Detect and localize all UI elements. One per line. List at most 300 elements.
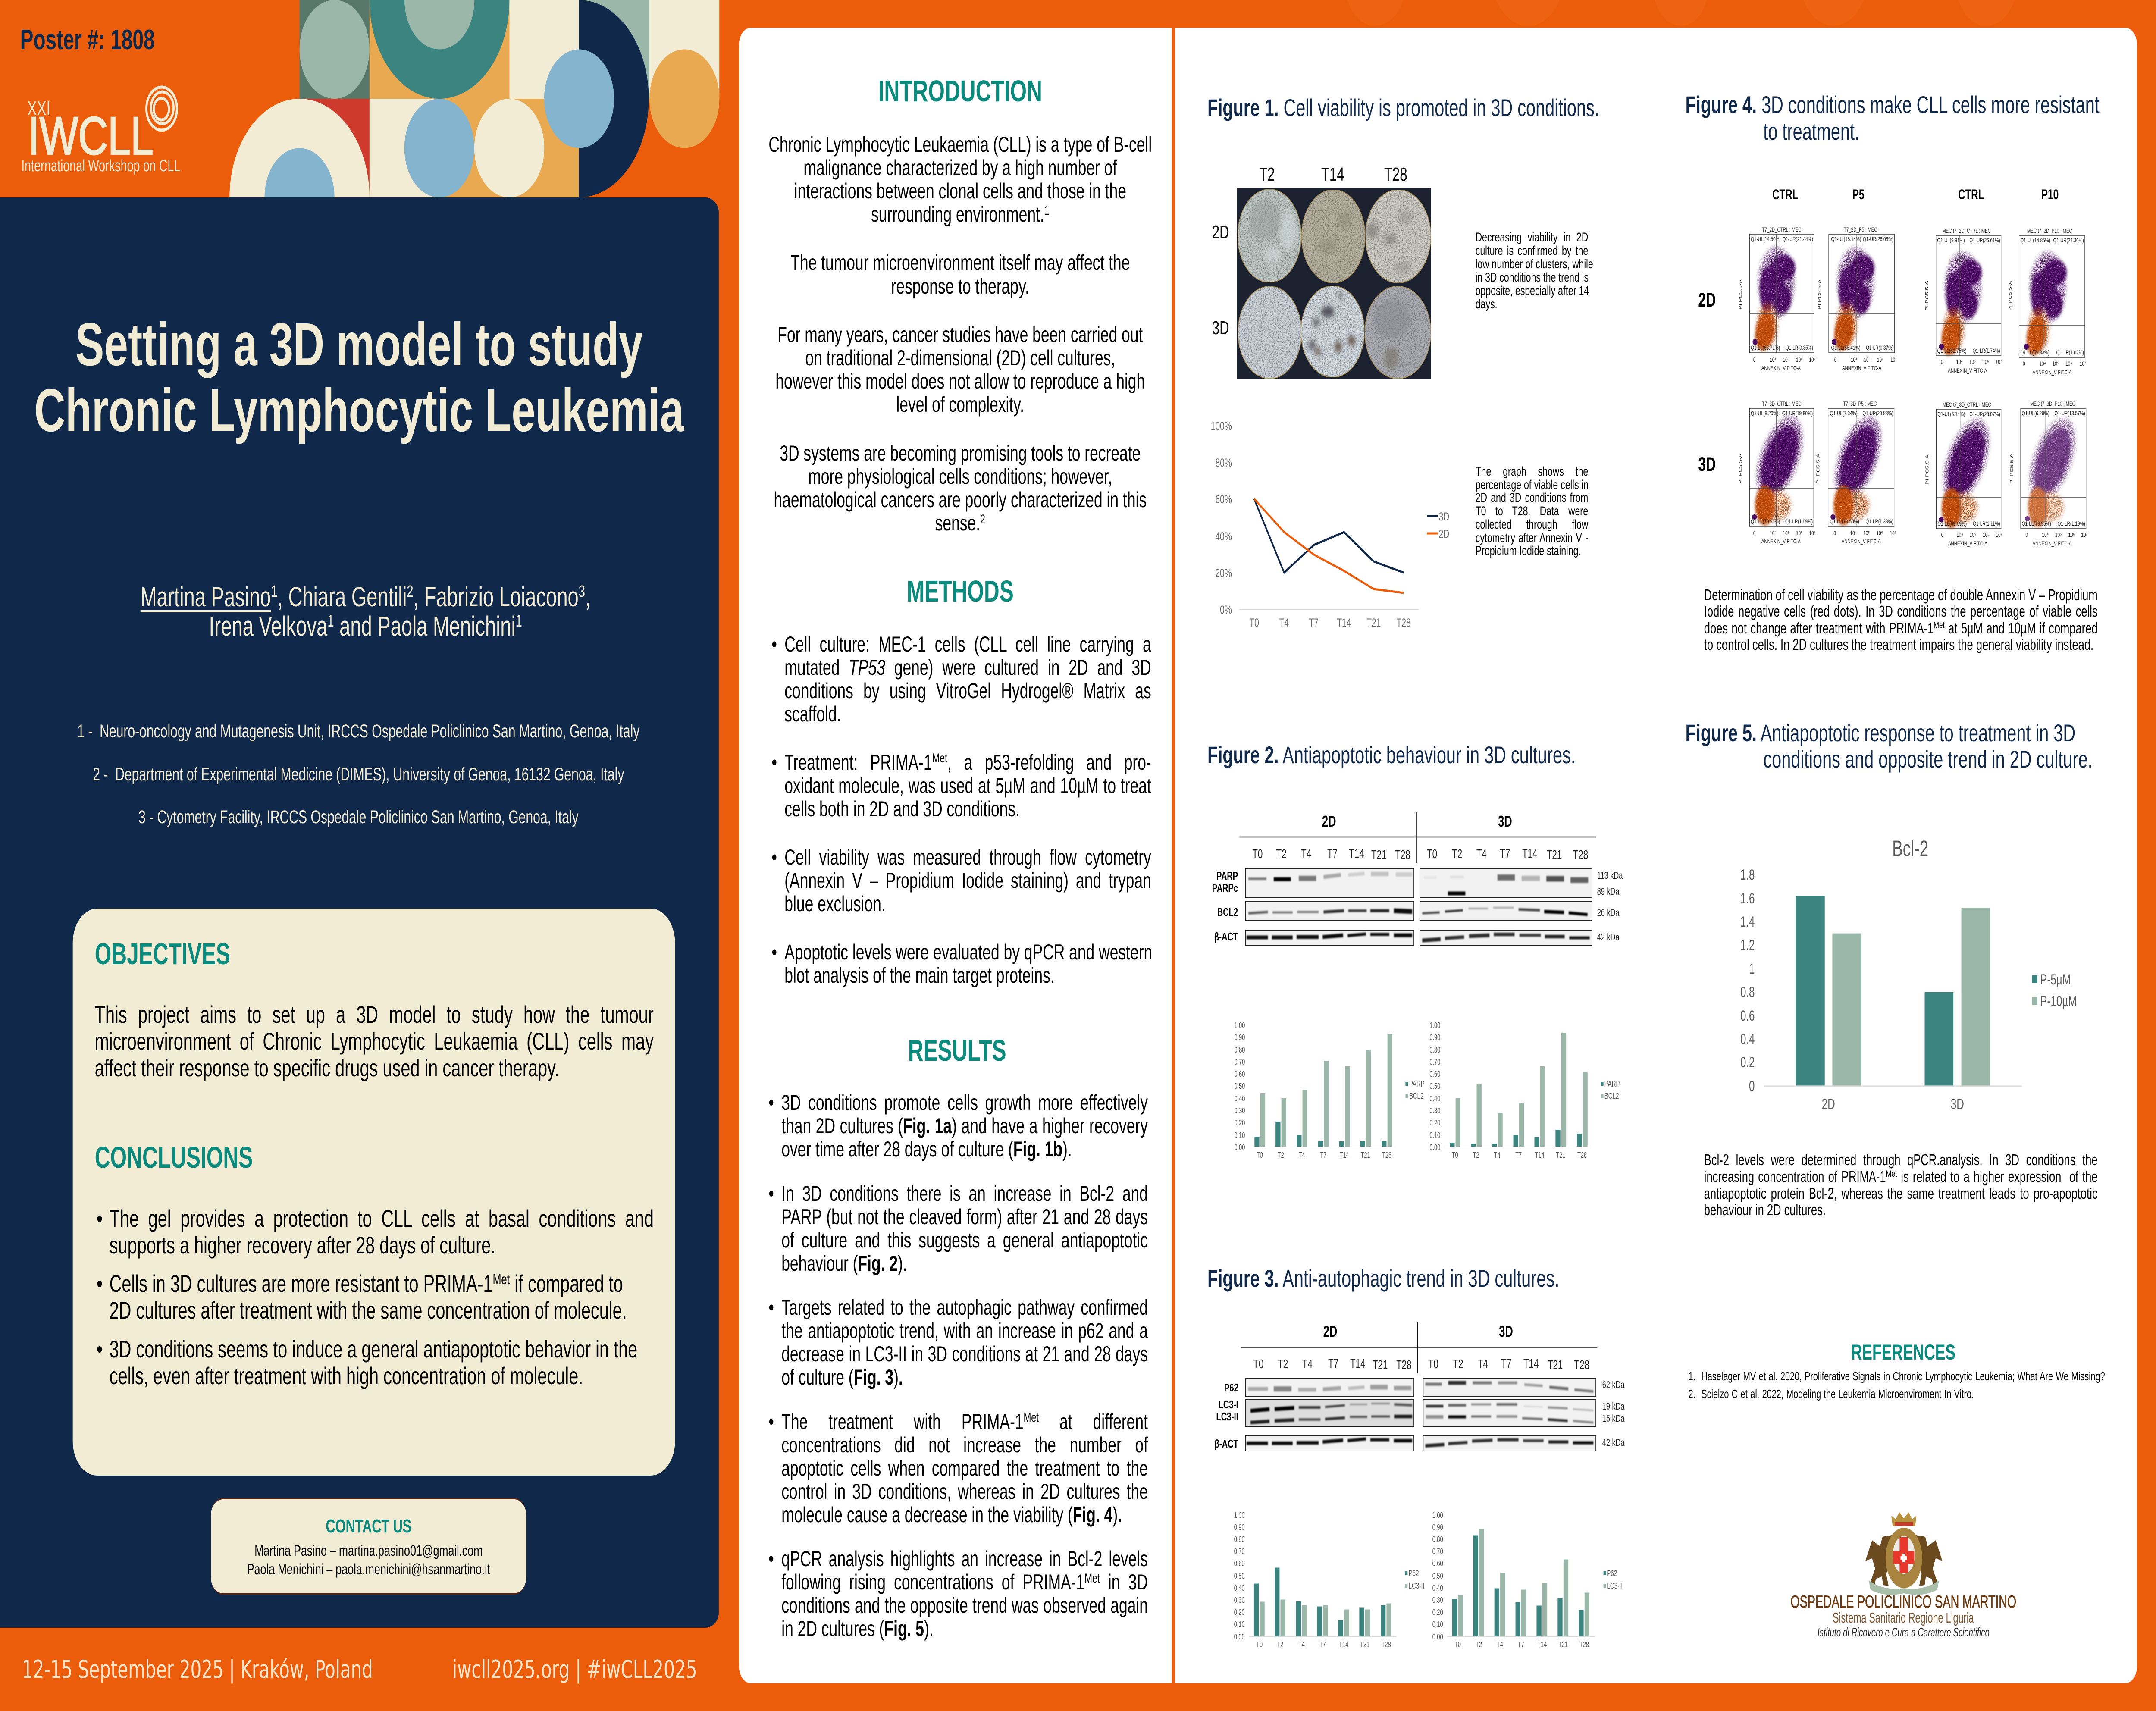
plot: 3D CTRL second series: 10⁷: [1996, 531, 2002, 538]
y axis labels: 0.4: [1740, 1031, 1755, 1047]
results list: behaviour (Fig. 2).: [781, 1251, 907, 1275]
bar chart: 3D P62 and LC3-II: T7: [1518, 1640, 1524, 1649]
y axis labels: 1.4: [1740, 914, 1755, 930]
plot: 2D P10: Q1-UL(14.85%): [2020, 237, 2050, 244]
plot: 3D P5: 10⁶: [1877, 530, 1883, 536]
contact heading: CONTACT US: [326, 1516, 411, 1537]
plot: 2D CTRL second series: MEC t7_2D_CTRL : MEC: [1942, 227, 1991, 234]
bar chart: 3D P62 and LC3-II: P62: [1607, 1569, 1617, 1578]
plot: 3D P10: Q1-LL(78.95%): [2022, 520, 2051, 527]
objectives text: affect their response to specific drugs used in cancer therapy.: [95, 1054, 559, 1081]
western blot header: 3D: [1498, 812, 1512, 830]
western blot header: T4: [1302, 1357, 1313, 1371]
line chart: percentage of viable cells: T21: [1366, 616, 1381, 629]
results list: conditions and the opposite trend was observed again: [781, 1593, 1148, 1617]
western blot header: T4: [1478, 1357, 1488, 1371]
poster number: Poster #: 1808: [20, 24, 155, 55]
results list: than 2D cultures (Fig. 1a) and have a higher recovery: [781, 1114, 1148, 1138]
bar chart: 3D P62 and LC3-II: T2: [1476, 1640, 1482, 1649]
bar chart: 2D P62 and LC3-II: 0.10: [1234, 1620, 1245, 1629]
western blot header: T28: [1573, 848, 1588, 862]
bar chart: 3D P62 and LC3-II: T21: [1558, 1640, 1568, 1649]
bar chart: 2D P62 and LC3-II: 0.00: [1234, 1633, 1245, 1641]
bar chart: 3D PARP and BCL2: [1429, 1021, 1620, 1159]
line chart: percentage of viable cells: [1211, 420, 1449, 629]
bar chart: 2D PARP and BCL2: T4: [1299, 1151, 1305, 1159]
methods list: Cell culture: MEC-1 cells (CLL cell line carrying a: [784, 632, 1151, 656]
plot: 2D P5: ANNEXIN_V FITC-A: [1842, 364, 1881, 371]
hospital name text: Sistema Sanitario Regione Liguria: [1833, 1610, 1974, 1626]
text: 2.: [1689, 1387, 1695, 1401]
bar chart: 3D PARP and BCL2: 0.10: [1429, 1131, 1440, 1140]
bar chart: 3D PARP and BCL2: T7: [1515, 1151, 1522, 1159]
western blot header: T14: [1522, 847, 1538, 861]
western blot header: T28: [1395, 848, 1410, 862]
plot: 2D P10: [2008, 227, 2086, 376]
line chart: percentage of viable cells: T4: [1279, 616, 1289, 629]
plot: 3D P10: 10⁴: [2042, 531, 2049, 538]
western blot molecular weights: 42 kDa: [1602, 1437, 1625, 1448]
bar chart: 2D P62 and LC3-II: T21: [1360, 1640, 1369, 1649]
bar chart: 3D PARP and BCL2: BCL2: [1604, 1092, 1619, 1101]
panel: contact us: [211, 1498, 526, 1595]
title: [0, 311, 718, 443]
flow labels: P5: [1852, 187, 1865, 202]
plot: 3D CTRL second series: 10⁶: [1983, 531, 1989, 538]
western blot protein labels: β-ACT: [1214, 930, 1238, 943]
plot: 2D P10: 10⁵: [2053, 360, 2059, 367]
plot: 2D CTRL: 10⁶: [1796, 356, 1802, 363]
figure 4 caption: [1704, 587, 2098, 653]
bar chart: 3D PARP and BCL2: 0.70: [1429, 1058, 1440, 1066]
bar chart: 2D PARP and BCL2: 0.30: [1234, 1106, 1245, 1115]
line chart: percentage of viable cells: 0%: [1220, 603, 1232, 616]
plot: 3D CTRL: T7_3D_CTRL : MEC: [1762, 400, 1801, 407]
plot: 2D CTRL second series: 10⁴: [1956, 358, 1963, 365]
legend: P-5µM: [2040, 971, 2071, 988]
hospital name text: OSPEDALE POLICLINICO SAN MARTINO: [1790, 1592, 2016, 1611]
category labels: 2D: [1822, 1096, 1835, 1112]
bar chart: 3D P62 and LC3-II: 0.10: [1432, 1620, 1443, 1629]
figure 4: flow cytometry plots: [1693, 181, 2096, 552]
plot: 2D P10: Q1-LL(59.83%): [2020, 349, 2049, 356]
results list: molecule cause a decrease in the viability (Fig. 4).: [781, 1502, 1122, 1526]
plot: 3D CTRL: 10⁴: [1770, 530, 1776, 536]
figure 1 text: microscopy description: in 3D conditions the trend is: [1476, 270, 1589, 285]
microscopy image labels: T28: [1384, 164, 1407, 185]
results list: apoptotic cells when compared the treatment to the: [781, 1456, 1148, 1480]
western blot header: T0: [1252, 847, 1263, 861]
objectives text: [95, 1001, 654, 1081]
plot: 2D CTRL: ANNEXIN_V FITC-A: [1761, 364, 1801, 371]
plot: 3D CTRL second series: MEC t7_3D_CTRL : MEC: [1943, 401, 1991, 408]
results list: following rising concentrations of PRIMA-1Met in 3D: [781, 1570, 1148, 1594]
bar chart: 3D P62 and LC3-II: T0: [1454, 1640, 1461, 1649]
results list: the antiapoptotic trend, with an increase in p62 and a: [781, 1319, 1148, 1343]
authors: Martina Pasino1, Chiara Gentili2, Fabrizio Loiacono3,: [141, 581, 591, 612]
contact details: Martina Pasino – martina.pasino01@gmail.com: [254, 1542, 483, 1559]
text: •: [772, 845, 777, 869]
plot: 3D P10: MEC t7_3D_P10 : MEC: [2030, 400, 2075, 407]
plot: 2D P10: 10⁴: [2039, 360, 2046, 367]
y axis labels: 1: [1749, 961, 1755, 977]
plot: 3D CTRL: 0: [1753, 530, 1756, 536]
plot: 2D CTRL second series: ANNEXIN_V FITC-A: [1948, 367, 1987, 374]
figure 1 text: graph description: [1476, 465, 1588, 558]
figure 2: western blot and bar charts: [1207, 806, 1626, 1164]
bar chart: 3D PARP and BCL2: T21: [1556, 1151, 1565, 1159]
bar chart: 3D PARP and BCL2: 0.80: [1429, 1046, 1440, 1054]
figure 5 title: conditions and opposite trend in 2D culture.: [1763, 746, 2093, 773]
figure 3 title: Figure 3. Anti-autophagic trend in 3D cultures.: [1207, 1265, 1559, 1292]
plot: 2D CTRL second series: Q1-LL(61.75%): [1937, 347, 1966, 354]
western blot header: T21: [1371, 848, 1386, 862]
IWCLL logo: International Workshop on CLL: [22, 157, 180, 175]
plot: 3D P5: Q1-LR(1.33%): [1866, 518, 1893, 525]
western blot protein labels: [1214, 1381, 1238, 1450]
plot: 3D CTRL: 10⁷: [1809, 530, 1815, 536]
background: faint orange shapes in top strip: [1284, 0, 2156, 28]
bar chart: 3D PARP and BCL2: 0.40: [1429, 1094, 1440, 1103]
footer: dates and website: iwcll2025.org | #iwCLL2025: [452, 1655, 697, 1684]
western blot header: T21: [1547, 848, 1562, 862]
methods list: blue exclusion.: [784, 892, 886, 916]
bar chart: 2D PARP and BCL2: PARP: [1409, 1080, 1425, 1089]
plot: 2D P10: Q1-LR(1.02%): [2056, 349, 2084, 356]
methods list: scaffold.: [784, 702, 841, 726]
western blot molecular weights: 89 kDa: [1597, 886, 1620, 897]
results list: 3D conditions promote cells growth more effectively: [781, 1091, 1148, 1115]
plot: 2D P10: 0: [2023, 360, 2025, 367]
bar chart: 2D P62 and LC3-II: T2: [1277, 1640, 1283, 1649]
figure 1 text: microscopy description: low number of clusters, while: [1476, 257, 1593, 271]
row labels 2D 3D: 3D: [1698, 453, 1716, 475]
bar chart: 2D PARP and BCL2: 0.50: [1234, 1082, 1245, 1091]
bar chart: 2D PARP and BCL2: 0.80: [1234, 1046, 1245, 1054]
plot: 2D P5: 10⁷: [1890, 356, 1897, 363]
methods list: Cell viability was measured through flow cytometry: [784, 845, 1151, 869]
hospital name text: [1790, 1592, 2016, 1639]
conclusions list: 3D conditions seems to induce a general antiapoptotic behavior in the: [110, 1335, 637, 1363]
western blot membranes: [1245, 868, 1592, 946]
microscopy image labels: T14: [1321, 164, 1344, 185]
figure 5 caption: [1704, 1152, 2098, 1219]
y axis labels: 1.2: [1740, 937, 1755, 953]
line chart: percentage of viable cells: T28: [1397, 616, 1411, 629]
plot: 3D CTRL second series: Q1-LR(1.11%): [1973, 520, 2000, 527]
plot: 2D CTRL second series: 0: [1941, 358, 1943, 365]
plot: 3D CTRL: 10⁶: [1796, 530, 1802, 536]
references list: Haselager MV et al. 2020, Proliferative Signals in Chronic Lymphocytic Leukemia; What Are We Missing?: [1701, 1369, 2105, 1383]
contact details: [211, 1542, 526, 1579]
text: •: [768, 1409, 774, 1433]
bar chart: 2D PARP and BCL2: 0.20: [1234, 1119, 1245, 1127]
western blot membranes: [1245, 1378, 1596, 1451]
plot: 2D CTRL: Q1-UR(21.44%): [1783, 235, 1813, 242]
western blot molecular weights: 15 kDa: [1602, 1413, 1625, 1424]
bar chart: 2D PARP and BCL2: 0.70: [1234, 1058, 1245, 1066]
plot: 2D CTRL: [1738, 226, 1815, 371]
bar chart: 3D P62 and LC3-II: 0.00: [1432, 1633, 1443, 1641]
plot: 2D P5: [1817, 226, 1897, 371]
contact details: Paola Menichini – paola.menichini@hsanmartino.it: [247, 1561, 490, 1578]
flow labels: P10: [2041, 187, 2059, 202]
text: •: [97, 1335, 103, 1363]
plot: 2D CTRL: Q1-LL(63.71%): [1751, 344, 1780, 351]
figure 4 caption: Iodide negative cells (red dots). In 3D conditions the percentage of viable cells: [1704, 602, 2098, 620]
plot: 3D CTRL second series: Q1-LL(69.69%): [1937, 520, 1967, 527]
plot: 2D P5: 10⁶: [1877, 356, 1883, 363]
introduction text: 3D systems are becoming promising tools to recreate: [780, 441, 1141, 465]
plot: 3D CTRL second series: Q1-UR(23.07%): [1969, 411, 2000, 417]
bar chart: 2D P62 and LC3-II: T4: [1298, 1640, 1305, 1649]
plot: 3D P10: PI PC5.5-A: [2009, 453, 2014, 484]
western blot header: T2: [1452, 847, 1462, 861]
references list: Scielzo C et al. 2022, Modeling the Leukemia Microenviroment In Vitro.: [1701, 1387, 1974, 1401]
y axis labels: 0.8: [1740, 984, 1755, 1000]
text: •: [768, 1295, 774, 1319]
methods list: mutated TP53 gene) were cultured in 2D and 3D: [784, 655, 1151, 680]
y axis labels: 0.2: [1740, 1054, 1755, 1071]
introduction text: level of complexity.: [896, 392, 1024, 417]
plot: 2D P10: 10⁶: [2065, 360, 2072, 367]
heading: results: RESULTS: [908, 1034, 1006, 1067]
bar chart: 3D P62 and LC3-II: LC3-II: [1607, 1582, 1623, 1591]
western blot header: T7: [1328, 1357, 1338, 1371]
methods list: [784, 633, 1151, 987]
figure 5 caption: antiapoptotic protein Bcl-2, whereas the same treatment leads to pro-apoptotic: [1704, 1185, 2098, 1202]
plot: 3D P5: PI PC5.5-A: [1815, 453, 1821, 484]
bar chart: 3D PARP and BCL2: 0.30: [1429, 1106, 1440, 1115]
western blot molecular weights: [1602, 1379, 1625, 1448]
y axis labels: [1740, 867, 1755, 1094]
plot: 3D CTRL: Q1-LR(1.09%): [1785, 518, 1813, 525]
bar chart: 2D P62 and LC3-II: T7: [1319, 1640, 1326, 1649]
plot: 3D CTRL second series: PI PC5.5-A: [1925, 454, 1930, 485]
line chart: percentage of viable cells: 80%: [1216, 456, 1232, 469]
plot: 2D CTRL: Q1-LR(0.35%): [1786, 344, 1813, 351]
plot: 3D CTRL second series: 10⁴: [1956, 531, 1963, 538]
bar chart: 2D PARP and BCL2: T14: [1340, 1151, 1349, 1159]
text: •: [772, 940, 777, 964]
introduction text: [764, 133, 1156, 535]
plot: 3D P10: 0: [2025, 531, 2028, 538]
western blot header: T28: [1574, 1358, 1589, 1372]
results list: The treatment with PRIMA-1Met at different: [781, 1409, 1148, 1433]
plot: 2D P5: T7_2D_P5 : MEC: [1844, 226, 1877, 233]
bar chart: 3D P62 and LC3-II: 0.80: [1432, 1535, 1443, 1544]
methods list: cells both in 2D and 3D conditions.: [784, 797, 1020, 821]
plot: 3D P10: 10⁷: [2081, 531, 2087, 538]
bar chart: 2D PARP and BCL2: T2: [1278, 1151, 1284, 1159]
western blot header: T0: [1253, 1357, 1263, 1371]
western blot header: 2D: [1322, 812, 1336, 830]
figure 1 text: microscopy description: Decreasing viability in 2D: [1476, 230, 1588, 244]
figure 1 text: microscopy description: culture is confirmed by the: [1476, 244, 1588, 258]
line chart: percentage of viable cells: T7: [1309, 616, 1319, 629]
western blot header: [1241, 1322, 1597, 1373]
western blot header: T14: [1350, 1357, 1366, 1371]
references list: [1701, 1368, 2105, 1403]
legend: [2032, 971, 2077, 1009]
line chart: percentage of viable cells: 60%: [1216, 493, 1232, 506]
footer: dates and website: [19, 1651, 703, 1690]
figure 1 text: microscopy description: [1476, 231, 1588, 311]
plot: 2D CTRL second series: 10⁶: [1982, 358, 1989, 365]
plot: 3D CTRL second series: 0: [1941, 531, 1943, 538]
figure 1 text: microscopy description: opposite, especially after 14: [1476, 284, 1589, 298]
results list: of culture and this suggests a general antiapoptotic: [781, 1228, 1148, 1252]
plot: 2D P5: 10⁴: [1851, 356, 1857, 363]
crest: griffins, shield and crown: [1865, 1512, 1943, 1595]
bar chart: 3D PARP and BCL2: T0: [1452, 1151, 1458, 1159]
western blot protein labels: P62: [1224, 1381, 1238, 1394]
plot: 3D P5: 0: [1833, 530, 1836, 536]
bar chart: 3D P62 and LC3-II: 0.60: [1432, 1559, 1443, 1568]
bar chart: 3D PARP and BCL2: T2: [1473, 1151, 1479, 1159]
bar chart: 2D PARP and BCL2: T7: [1320, 1151, 1326, 1159]
figure 2 title: Figure 2. Antiapoptotic behaviour in 3D cultures.: [1207, 741, 1576, 768]
plot: 2D CTRL: 10⁴: [1770, 356, 1776, 363]
text: •: [768, 1091, 774, 1115]
plot: 2D CTRL second series: Q1-UL(9.91%): [1937, 237, 1965, 244]
figure 5 caption: Bcl-2 levels were determined through qPCR.analysis. In 3D conditions the: [1704, 1151, 2098, 1169]
y axis labels: 0: [1749, 1078, 1755, 1094]
bar chart: 3D PARP and BCL2: 0.20: [1429, 1119, 1440, 1127]
plot: 2D P5: 10⁵: [1864, 356, 1871, 363]
bar chart: 2D PARP and BCL2: 0.10: [1234, 1131, 1245, 1140]
plot: 3D P5: T7_3D_P5 : MEC: [1843, 400, 1877, 407]
figure 1 text: graph description: percentage of viable cells in: [1476, 478, 1589, 492]
plot: 3D CTRL: 10⁵: [1783, 530, 1789, 536]
objectives text: microenvironment of Chronic Lymphocytic Leukaemia (CLL) cells may: [95, 1028, 654, 1055]
introduction text: response to therapy.: [891, 274, 1029, 298]
western blot molecular weights: 26 kDa: [1597, 907, 1620, 918]
chart title: Bcl-2: [1892, 837, 1928, 862]
plot: 2D P5: 0: [1834, 356, 1836, 363]
IWCLL logo: IWCLL: [28, 107, 154, 166]
western blot header: T4: [1301, 847, 1311, 861]
footer: dates and website: 12-15 September 2025 | Kraków, Poland: [22, 1655, 373, 1684]
plot: 2D CTRL: T7_2D_CTRL : MEC: [1762, 226, 1801, 233]
plot: 2D P10: MEC t7_2D_P10 : MEC: [2027, 227, 2072, 234]
bar chart: 2D PARP and BCL2: 1.00: [1234, 1021, 1245, 1030]
affiliations: [0, 710, 717, 839]
bars: [1764, 896, 2022, 1086]
bar chart: 3D PARP and BCL2: 0.60: [1429, 1070, 1440, 1078]
objectives text: This project aims to set up a 3D model to study how the tumour: [95, 1000, 654, 1028]
western blot protein labels: BCL2: [1217, 906, 1238, 918]
bar chart: 3D PARP and BCL2: 0.50: [1429, 1082, 1440, 1091]
microscopy image labels: 3D: [1212, 317, 1229, 338]
introduction text: malignance characterized by a high number of: [803, 156, 1117, 180]
geometric art blocks: [229, 0, 719, 197]
figure 5 caption: behaviour in 2D cultures.: [1704, 1201, 1826, 1219]
conclusions list: [110, 1205, 654, 1389]
figure 4 caption: to control cells. In 2D cultures the treatment impairs the general viability instead.: [1704, 636, 2093, 653]
figure 4 title: [1686, 91, 2100, 145]
western blot molecular weights: 62 kDa: [1602, 1379, 1625, 1390]
methods list: Treatment: PRIMA-1Met, a p53-refolding and pro-: [784, 750, 1151, 774]
plot: 3D P10: Q1-UR(13.57%): [2054, 410, 2085, 417]
hospital logo: [1785, 1507, 2023, 1645]
heading: conclusions: CONCLUSIONS: [95, 1141, 253, 1174]
western blot header: T2: [1453, 1357, 1463, 1371]
header: geometric art, poster number and IWCLL logo: [0, 0, 719, 197]
bar chart: 2D P62 and LC3-II: 0.60: [1234, 1559, 1245, 1568]
plot: 3D CTRL second series: ANNEXIN_V FITC-A: [1948, 540, 1987, 547]
figure 1 text: graph description: cytometry after Annexin V -: [1476, 531, 1588, 545]
introduction text: more physiological cells conditions; however,: [808, 464, 1112, 489]
results list: of culture (Fig. 3).: [781, 1365, 903, 1389]
microscopy image labels: T2: [1259, 164, 1275, 185]
bar chart: 2D PARP and BCL2: [1234, 1021, 1425, 1159]
figure 4 title: to treatment.: [1763, 118, 1859, 145]
results list: qPCR analysis highlights an increase in Bcl-2 levels: [781, 1547, 1148, 1571]
line chart: percentage of viable cells: T14: [1337, 616, 1351, 629]
row labels 2D 3D: 2D: [1698, 289, 1716, 311]
figure 4 caption: Determination of cell viability as the percentage of double Annexin V – Propidium: [1704, 586, 2098, 604]
bar chart: 2D PARP and BCL2: T21: [1361, 1151, 1370, 1159]
western blot header: T21: [1548, 1358, 1563, 1372]
western blot protein labels: LC3-I: [1219, 1398, 1238, 1411]
western blot header: T2: [1278, 1357, 1288, 1371]
conclusions list: supports a higher recovery after 28 days of culture.: [110, 1232, 495, 1259]
plot: 3D CTRL second series: 10⁵: [1970, 531, 1976, 538]
hospital name text: Istituto di Ricovero e Cura a Carattere Scientifico: [1818, 1626, 1990, 1639]
text: •: [97, 1205, 103, 1232]
text: •: [768, 1181, 774, 1206]
western blot header: T0: [1427, 847, 1437, 861]
line chart: percentage of viable cells: T0: [1249, 616, 1259, 629]
western blot protein labels: [1212, 869, 1238, 943]
methods list: Apoptotic levels were evaluated by qPCR and western: [784, 940, 1152, 964]
affiliations: 2 - Department of Experimental Medicine (DIMES), University of Genoa, 16132 Genoa, Italy: [93, 765, 624, 785]
plot: 2D P10: Q1-UR(24.30%): [2053, 237, 2084, 244]
bar chart: 2D PARP and BCL2: T28: [1382, 1151, 1391, 1159]
plot: 2D CTRL second series: Q1-UR(26.61%): [1969, 237, 2000, 244]
plot: 2D P5: Q1-UL(15.14%): [1831, 235, 1861, 242]
plot: 3D P5: [1815, 400, 1896, 545]
bar chart: 3D PARP and BCL2: 0.00: [1429, 1143, 1440, 1152]
western blot header: T7: [1501, 1357, 1511, 1371]
western blot molecular weights: 19 kDa: [1602, 1401, 1625, 1412]
plot: 3D P5: Q1-LL(70.50%): [1830, 518, 1859, 525]
heading: introduction: INTRODUCTION: [878, 74, 1042, 108]
western blot protein labels: LC3-II: [1216, 1410, 1238, 1423]
western blot header: 2D: [1323, 1322, 1337, 1340]
bar chart: 3D P62 and LC3-II: 0.50: [1432, 1572, 1443, 1580]
y axis labels: 1.6: [1740, 890, 1755, 907]
western blot header: 3D: [1499, 1322, 1513, 1340]
methods list: blot analysis of the main target proteins.: [784, 963, 1055, 987]
plot: 2D CTRL: PI PC5.5-A: [1738, 279, 1743, 310]
line chart: percentage of viable cells: 20%: [1216, 567, 1232, 580]
plot: 2D P10: ANNEXIN_V FITC-A: [2033, 369, 2072, 376]
title: Chronic Lymphocytic Leukemia: [34, 376, 684, 444]
microscopy image labels: [1212, 164, 1407, 338]
results list: In 3D conditions there is an increase in Bcl-2 and: [781, 1181, 1148, 1206]
introduction text: however this model does not allow to reproduce a high: [775, 369, 1145, 393]
IWCLL logo: XXI: [27, 97, 50, 119]
bar chart: 2D P62 and LC3-II: 0.70: [1234, 1547, 1245, 1556]
bar chart: 3D PARP and BCL2: 0.90: [1429, 1033, 1440, 1042]
category labels: 3D: [1951, 1096, 1964, 1112]
bar chart: 3D P62 and LC3-II: [1432, 1511, 1623, 1649]
western blot header: T2: [1276, 847, 1287, 861]
western blot header: T7: [1327, 847, 1338, 861]
bar chart: 2D P62 and LC3-II: 0.40: [1234, 1584, 1245, 1592]
